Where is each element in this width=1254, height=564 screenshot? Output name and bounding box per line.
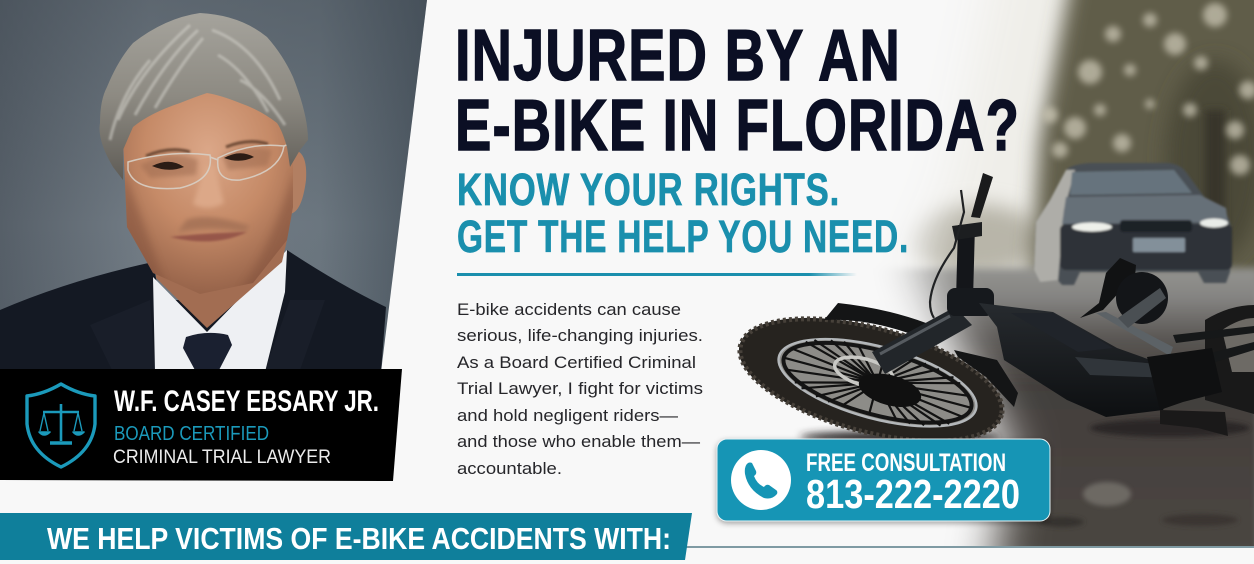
bottom banner xyxy=(0,513,692,560)
subheadline: KNOW YOUR RIGHTS. xyxy=(457,164,840,215)
e-bike saddle xyxy=(1080,258,1168,328)
right ear xyxy=(292,152,306,214)
portrait of attorney xyxy=(0,13,386,372)
banner heading: WE HELP VICTIMS OF E-BIKE ACCIDENTS WITH: xyxy=(47,521,671,556)
body copy: accountable. xyxy=(457,459,562,478)
body copy: E-bike accidents can cause xyxy=(457,300,681,319)
facial features xyxy=(120,142,300,290)
asphalt details xyxy=(800,419,1250,527)
credential line 1: BOARD CERTIFIED xyxy=(114,423,269,445)
headline: INJURED BY AN xyxy=(455,16,901,96)
name plate xyxy=(0,369,402,481)
blurred grey car xyxy=(1034,163,1232,285)
face xyxy=(123,90,293,294)
glasses xyxy=(128,143,292,189)
e-bike frame and battery xyxy=(979,303,1254,436)
consultation call button xyxy=(717,439,1050,521)
e-bike fork xyxy=(872,307,972,374)
icon: shield with scales xyxy=(27,384,95,467)
body copy: and hold negligent riders— xyxy=(457,406,678,425)
e-bike handlebar and stem xyxy=(930,173,994,318)
nose xyxy=(194,170,224,208)
eyebrows xyxy=(146,142,268,156)
shirt collar xyxy=(153,250,287,372)
subheadline: GET THE HELP YOU NEED. xyxy=(457,211,909,262)
eyes xyxy=(152,153,254,170)
eye sockets xyxy=(140,147,272,178)
body copy xyxy=(457,300,703,478)
mouth xyxy=(170,232,247,241)
scene backdrop: sky, trees and road xyxy=(893,0,1254,546)
headline: E-BIKE IN FLORIDA? xyxy=(455,86,1020,166)
attorney name: W.F. CASEY EBSARY JR. xyxy=(114,385,379,418)
divider rule xyxy=(457,273,857,276)
e-bike mudguards xyxy=(824,303,1018,407)
hair highlights xyxy=(110,25,285,140)
cheek and jaw shade xyxy=(125,178,293,284)
body copy: Trial Lawyer, I fight for victims xyxy=(457,379,703,398)
photo: crash scene with car and e-bike xyxy=(737,0,1254,546)
credential line 2: CRIMINAL TRIAL LAWYER xyxy=(113,446,331,468)
body copy: and those who enable them— xyxy=(457,432,700,451)
body copy: As a Board Certified Criminal xyxy=(457,353,696,372)
neck xyxy=(156,240,287,328)
body copy: serious, life-changing injuries. xyxy=(457,326,703,345)
e-bike rear wheel xyxy=(1205,305,1254,414)
moustache shadow xyxy=(178,217,250,232)
icon: phone xyxy=(731,450,791,510)
headline xyxy=(455,16,1020,166)
free consultation label: FREE CONSULTATION xyxy=(806,449,1006,477)
suit jacket xyxy=(0,250,386,372)
hair xyxy=(100,13,308,180)
phone number: 813-222-2220 xyxy=(806,471,1020,517)
e-bike front wheel xyxy=(737,316,1004,438)
left panel: grey portrait background xyxy=(0,0,427,372)
bottom divider line xyxy=(680,546,1254,548)
subheadline xyxy=(457,164,909,262)
necktie xyxy=(183,333,232,372)
lapel shading xyxy=(90,300,325,370)
